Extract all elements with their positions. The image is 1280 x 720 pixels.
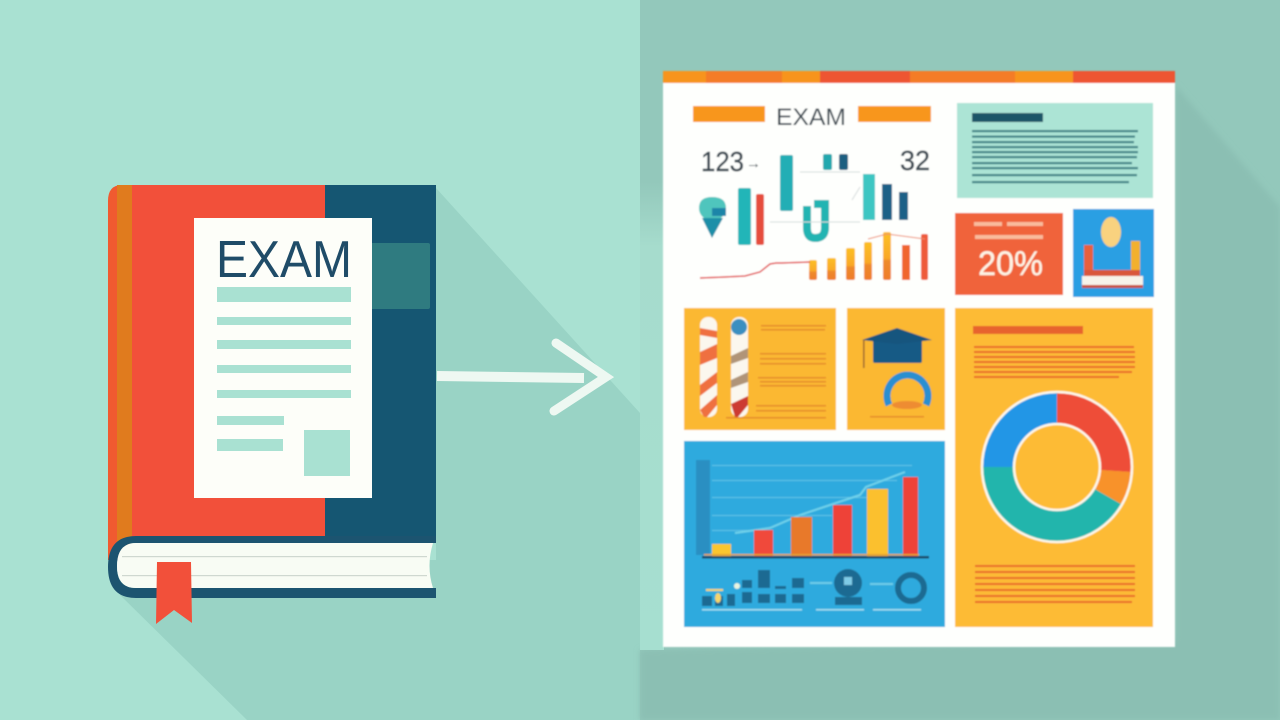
top colour strip [663,71,1175,83]
right background [640,0,1280,720]
panel: charts at top left [693,104,931,280]
panel text lines [726,325,826,418]
icon row [702,570,862,606]
bookmark [156,562,192,624]
donut outer edge [982,392,1132,542]
ring base [892,401,922,409]
slice: blue [983,393,1057,467]
number left: 123 [701,146,744,177]
book pages [108,536,436,598]
chart baseline [702,554,929,558]
icon: ring badge [898,575,924,601]
slice: teal [983,467,1121,541]
connector lines [810,582,893,585]
u-shaped pipe [807,204,825,238]
icon: striped pole right [731,317,748,417]
chart y axis band [696,460,710,555]
bottom text lines [975,565,1135,603]
heading band right [858,106,931,122]
number right: 32 [900,145,930,176]
icon: person on book [1082,217,1143,288]
icon: blue ring [887,375,928,405]
panel: yellow donut card [955,308,1153,627]
panel: blue bar chart [684,441,945,627]
icon: graduation cap [862,328,932,368]
icon: shield gem [699,197,726,238]
small arrow mark: → [746,155,761,172]
block text lines [972,130,1138,183]
slice: red [1057,393,1131,472]
paper text lines [217,287,351,451]
slice: orange [1094,470,1131,504]
navy cover [325,185,436,540]
arrow [437,343,606,411]
faint guide lines [770,172,860,222]
upper trend line [868,234,925,239]
panel: yellow graduation card [847,308,945,430]
long shadow of the book [120,188,640,720]
panel: orange stat [955,213,1063,295]
block title [972,113,1043,122]
stat caption lines [974,222,1043,239]
icon: small highlight [706,583,740,603]
chart grid lines [712,465,912,531]
book cover spine [108,185,132,560]
red trend line [700,262,810,278]
red front cover [132,185,325,540]
icon: exam book [108,185,436,624]
small labels [702,609,921,610]
card title [973,326,1083,334]
donut chart [982,392,1132,542]
stat value: 20% [978,245,1043,283]
left background [0,0,640,720]
heading band left [693,106,765,122]
heading: EXAM [776,104,846,131]
panel: yellow striped poles [684,308,836,430]
trend line [735,472,905,533]
paper image block [304,430,350,476]
spine stripe [117,185,132,550]
icon: clock badge [834,569,862,597]
panel: infographic poster [663,71,1175,647]
chart bars [712,477,918,556]
exam paper [194,218,372,498]
light strip left of the poster [640,0,664,650]
base line [870,416,924,418]
long shadow of the poster [640,85,1280,720]
icon: striped pole left [700,317,717,417]
orange bar chart [809,232,928,280]
top text lines [974,346,1135,378]
donut inner edge [1014,424,1100,510]
teal tab [370,243,430,309]
teal and navy bar group [738,154,908,245]
panel: blue icon card [1073,209,1154,297]
panel: mint text block [957,103,1153,198]
paper title: EXAM [216,231,352,289]
